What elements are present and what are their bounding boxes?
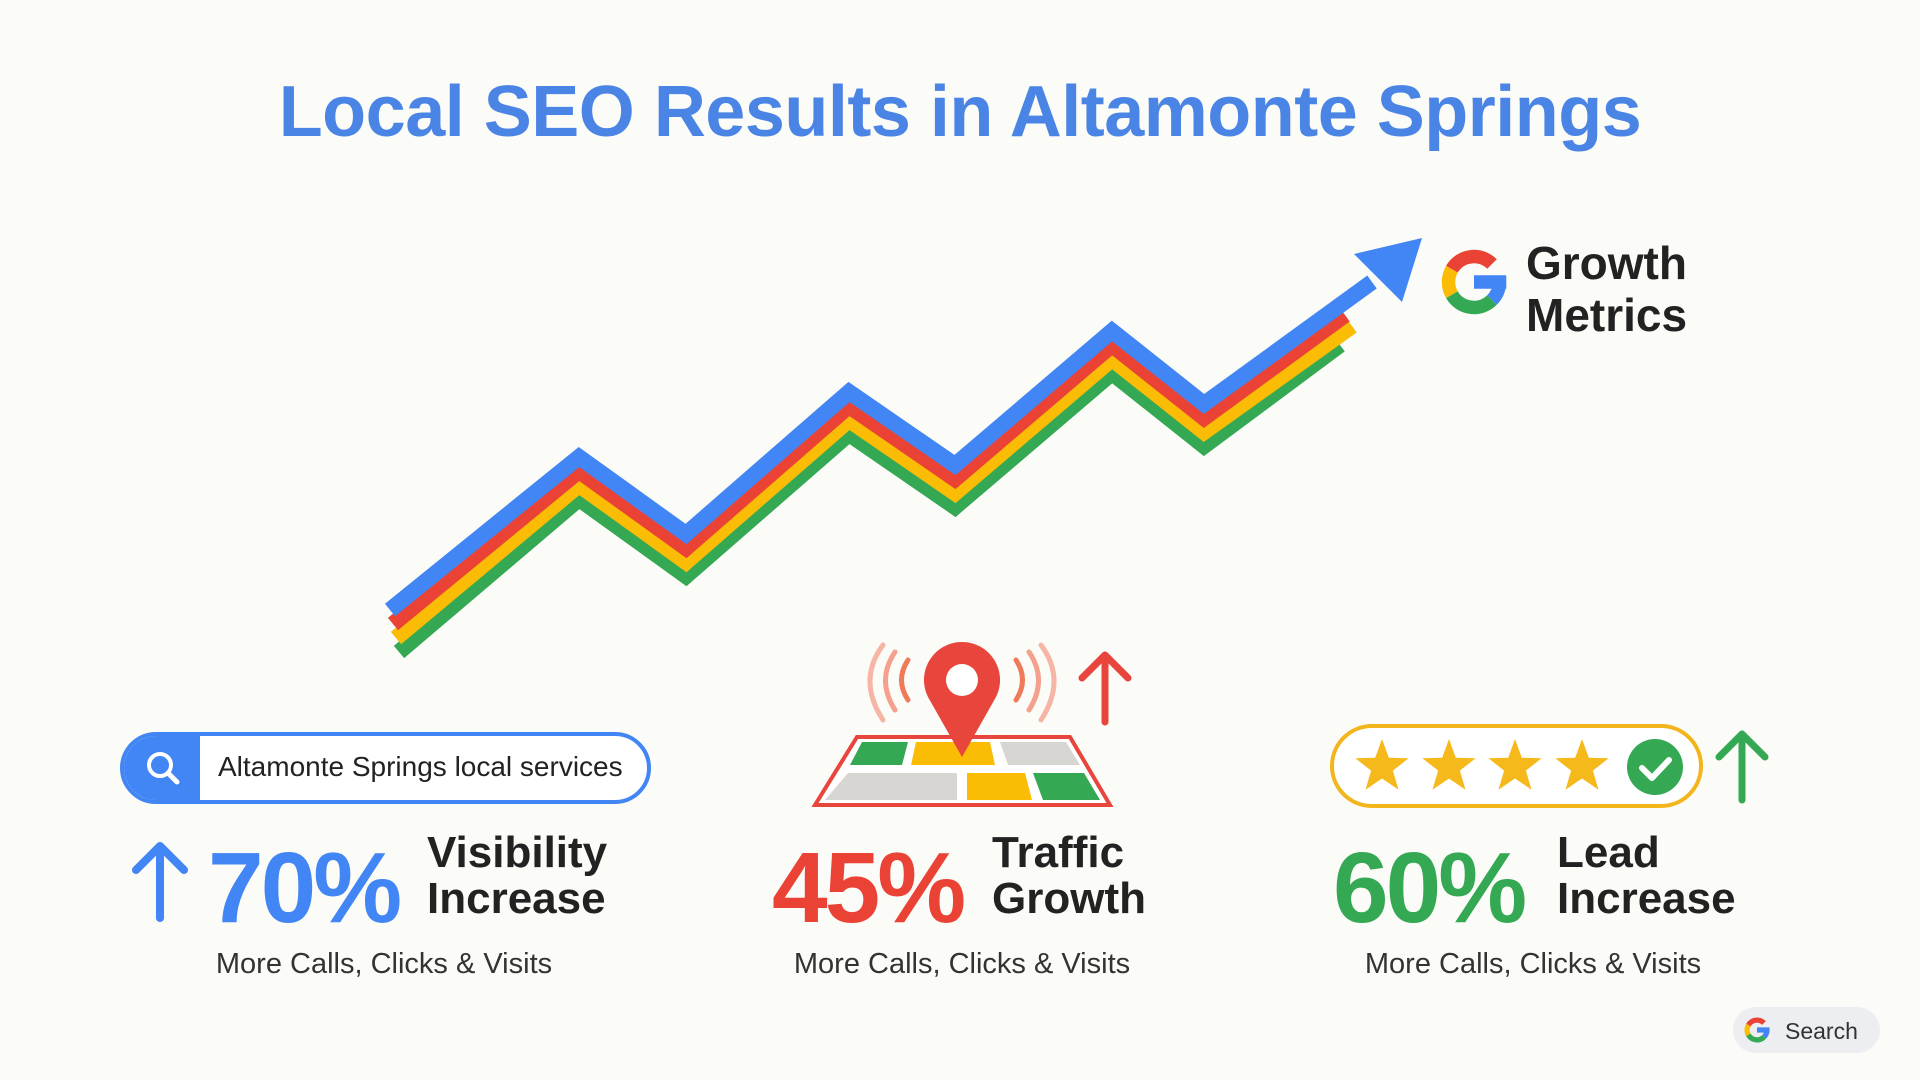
icon: google G [1442, 250, 1506, 314]
rating box [1330, 724, 1768, 808]
search bar [120, 732, 651, 804]
label [427, 828, 607, 923]
label: Increase [427, 874, 606, 923]
legend text: Growth [1526, 237, 1687, 289]
search button: Search [1785, 1018, 1858, 1044]
icon: magnifier [124, 736, 200, 800]
number: 60% [1333, 832, 1524, 944]
title: Local SEO Results in Altamonte Springs [279, 72, 1641, 152]
caption 2: More Calls, Clicks & Visits [794, 948, 1130, 980]
legend text: Metrics [1526, 289, 1687, 341]
label: Visibility [427, 828, 607, 877]
icon: map pin [812, 642, 1132, 807]
label: Increase [1557, 874, 1736, 923]
stat: leads [1333, 828, 1736, 944]
label: Traffic [992, 828, 1124, 877]
number: 45% [772, 832, 963, 944]
label [1557, 828, 1736, 923]
caption 3: More Calls, Clicks & Visits [1365, 948, 1701, 980]
number: 70% [208, 832, 399, 944]
label [992, 828, 1146, 923]
icon: up arrow blue [132, 842, 188, 922]
legend: Growth Metrics [1442, 237, 1687, 341]
label: Growth [992, 874, 1146, 923]
search button [1733, 1007, 1880, 1053]
label: Lead [1557, 828, 1660, 877]
stat: visibility [132, 828, 607, 944]
legend text [1526, 237, 1687, 341]
caption 1: More Calls, Clicks & Visits [216, 948, 552, 980]
stat: traffic [772, 828, 1146, 944]
search text: Altamonte Springs local services [218, 751, 623, 782]
